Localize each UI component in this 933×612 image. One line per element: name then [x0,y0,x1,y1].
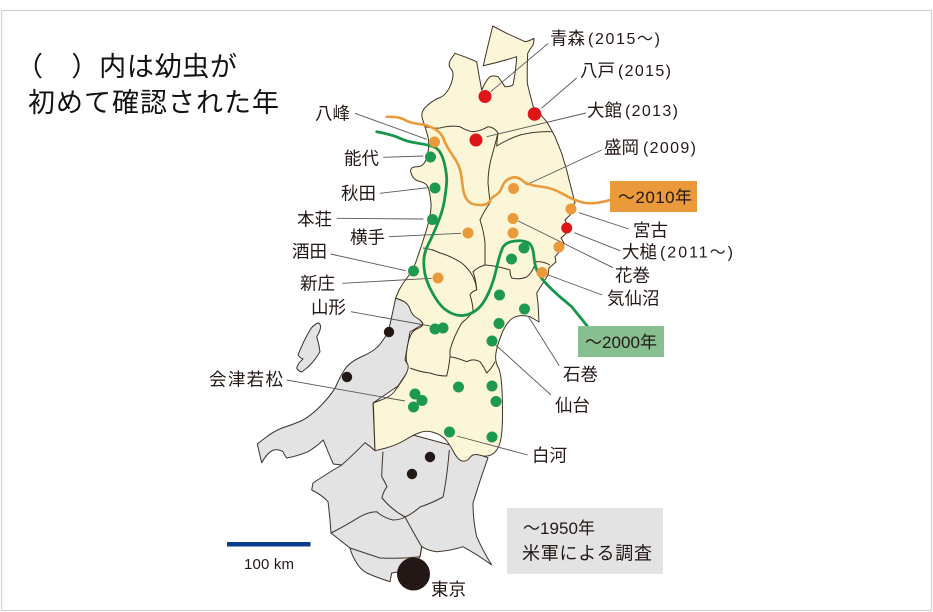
dots: green [408,152,530,442]
city labels: 八戸 [580,60,615,80]
city labels: 八峰 [315,104,350,124]
scale bar [227,542,310,573]
legend: 1950 survey [507,508,663,574]
callout: 2010: ～2010年 [618,188,692,207]
city labels: (2011～) [660,244,733,262]
callout: 2000 [578,326,664,357]
city labels: 山形 [311,298,346,318]
city labels: 酒田 [292,242,327,262]
city labels: (2015) [618,63,671,80]
line: 2010 front [387,117,610,205]
city labels: 花巻 [615,266,650,286]
dots: black [342,327,435,590]
city labels: 盛岡 [604,138,639,158]
title: （ ）内は幼虫が [16,52,237,82]
city labels: 白河 [532,446,567,466]
prefecture borders [410,126,552,376]
city labels: (2013) [625,103,678,120]
city labels: (2015～) [588,31,660,48]
region: gray kanto and niigata [257,298,492,582]
line: 2000 front [377,132,588,327]
city labels: 横手 [350,228,385,248]
city labels: 大館 [587,100,622,120]
callout: 2010 [610,181,697,212]
title: 初めて確認された年 [28,88,279,118]
city labels: 会津若松 [209,370,283,390]
dots: red [470,90,572,234]
map [257,26,629,590]
city labels: 能代 [344,148,379,168]
leader lines [287,43,629,455]
city labels: 青森 [550,28,585,48]
city labels: 宮古 [633,220,668,240]
city labels: 新庄 [300,274,335,294]
dots: orange [429,136,576,284]
city labels: 秋田 [341,184,376,204]
scale bar: 100 km [244,556,294,573]
city labels: (2009) [643,140,696,157]
city labels: 本荘 [297,210,332,230]
legend: 1950 survey: ～1950年 [523,519,595,538]
city labels: 気仙沼 [607,288,660,308]
city labels: 石巻 [563,364,598,384]
city labels: 東京 [431,580,466,600]
region: yellow tohoku [373,26,575,461]
city labels [209,28,733,600]
legend: 1950 survey: 米軍による調査 [522,544,652,564]
callout: 2000: ～2000年 [585,333,657,352]
city labels: 仙台 [555,396,590,416]
island: sado [297,323,321,372]
title [16,52,279,118]
city labels: 大槌 [622,242,657,262]
